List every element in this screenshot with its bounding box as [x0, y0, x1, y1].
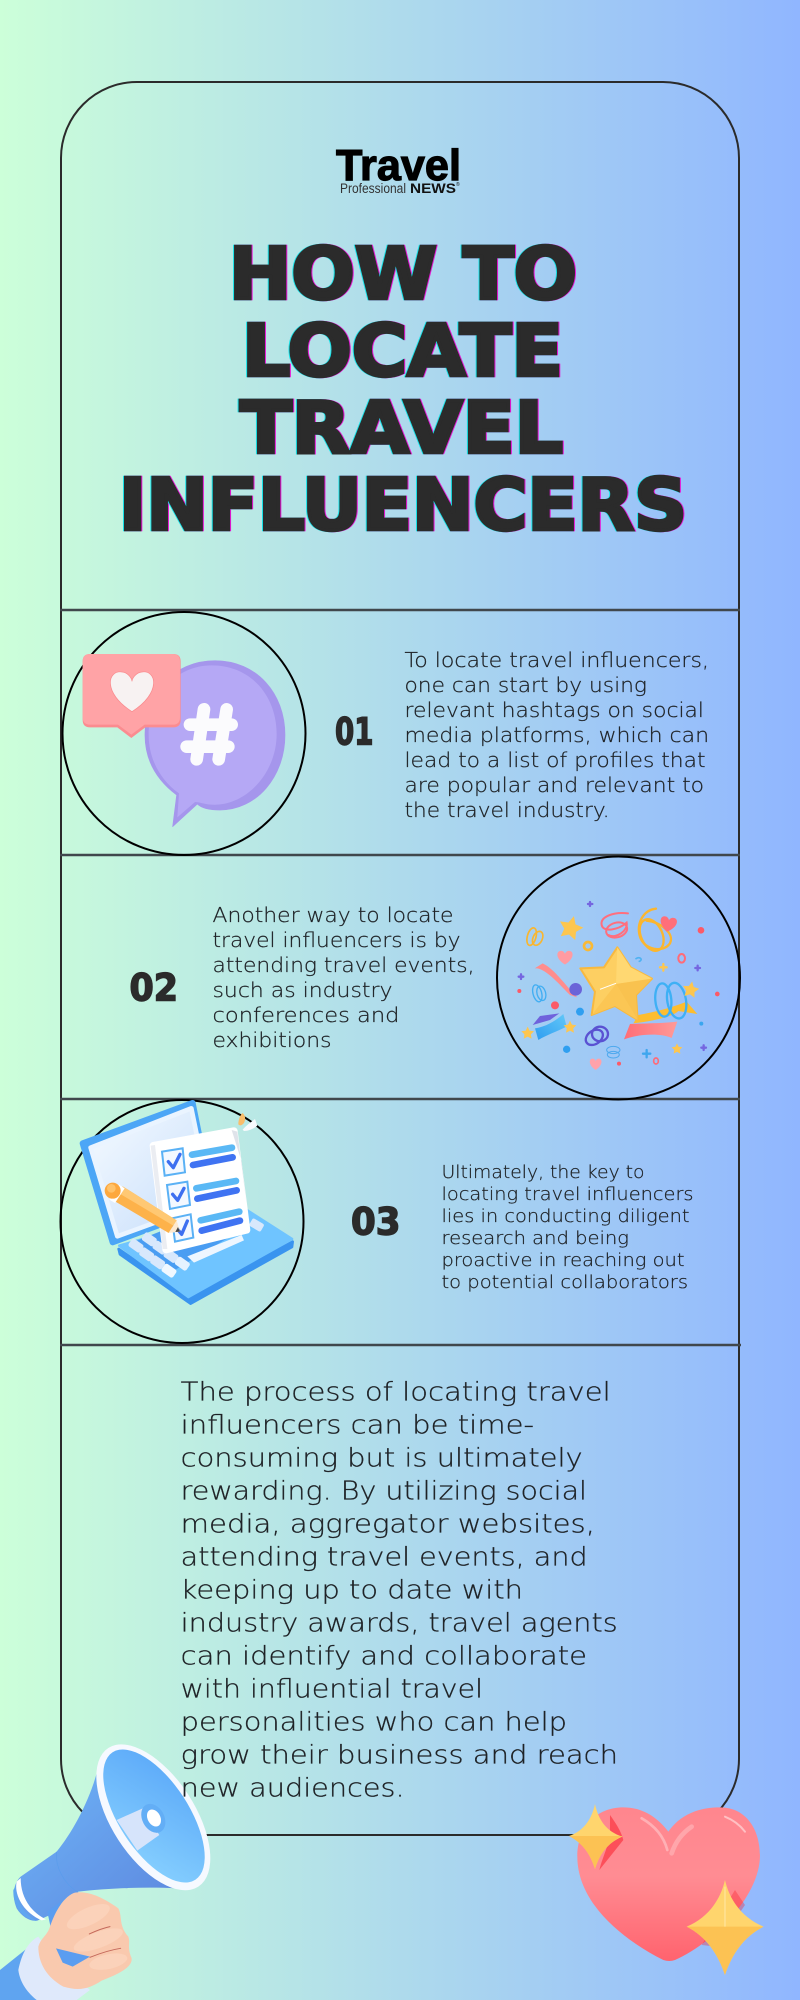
- closing paragraph: industry awards, travel agents: [181, 1608, 618, 1638]
- logo: Travel Professional News: Travel: [336, 141, 461, 190]
- logo: Travel Professional News: Professional: [340, 181, 406, 196]
- closing paragraph: personalities who can help: [181, 1708, 567, 1738]
- closing paragraph: keeping up to date with: [181, 1576, 523, 1606]
- megaphone rim and cone: [73, 1725, 233, 1909]
- closing paragraph: rewarding. By utilizing social: [181, 1476, 587, 1506]
- checklist paper: [151, 1130, 247, 1250]
- megaphone body: [13, 1773, 177, 1921]
- step 03 text: lies in conducting diligent: [442, 1206, 690, 1227]
- plus marks: [519, 902, 706, 1057]
- laptop base and keyboard: [119, 1210, 293, 1304]
- step 03 text: proactive in reaching out: [442, 1250, 684, 1271]
- step 02 text: exhibitions: [212, 1028, 332, 1052]
- laptop screen: [83, 1103, 213, 1242]
- large sparkle: [687, 1880, 764, 1975]
- sleeve and cuff: [0, 1937, 90, 2000]
- step 02 text: Another way to locate: [212, 903, 454, 927]
- step 02 number: 02: [130, 966, 178, 1010]
- icon: star and confetti: [517, 902, 720, 1070]
- step 03 circle: [60, 1100, 304, 1343]
- pencil: [105, 1183, 180, 1233]
- step 01 text: media platforms, which can: [404, 723, 709, 747]
- small stars: [521, 913, 700, 1054]
- coils and rings: [525, 909, 689, 1064]
- closing paragraph: media, aggregator websites,: [181, 1510, 595, 1540]
- step 01 text: [404, 648, 709, 822]
- step 02 text: such as industry: [212, 978, 392, 1002]
- logo: Travel Professional News: NEWS: [410, 181, 456, 196]
- step 02 text: attending travel events,: [212, 953, 474, 977]
- title: HOW TO: [229, 232, 577, 316]
- step 01 circle: [62, 612, 306, 855]
- title: TRAVEL: [240, 386, 563, 470]
- title: INFLUENCERS: [119, 464, 687, 546]
- closing paragraph: [181, 1378, 618, 1804]
- small sparkle: [569, 1804, 622, 1869]
- step 01 text: To locate travel influencers,: [404, 648, 709, 672]
- closing paragraph: with influential travel: [181, 1674, 483, 1704]
- step 01 text: are popular and relevant to: [404, 773, 704, 797]
- step 03 text: locating travel influencers: [442, 1184, 694, 1205]
- step 03 text: Ultimately, the key to: [442, 1162, 644, 1183]
- closing paragraph: can identify and collaborate: [181, 1642, 587, 1672]
- closing paragraph: The process of locating travel: [181, 1378, 611, 1408]
- pencil shavings: [238, 1113, 257, 1131]
- icon: hashtag speech bubble and heart notification: [83, 654, 285, 827]
- step 01 text: the travel industry.: [404, 798, 610, 822]
- pink like notification: [83, 654, 181, 738]
- hand: [38, 1892, 132, 1989]
- step 02 text: travel influencers is by: [212, 928, 460, 952]
- heart: [577, 1807, 760, 1961]
- closing paragraph: consuming but is ultimately: [181, 1444, 583, 1474]
- main star: [580, 947, 652, 1020]
- icon: megaphone in hand: [0, 1725, 233, 2000]
- step 03 text: to potential collaborators: [442, 1272, 688, 1293]
- handle: [47, 1893, 77, 1940]
- step 02 circle: [497, 856, 740, 1100]
- step 03 text: research and being: [442, 1228, 629, 1249]
- step 01 number: 01: [335, 710, 374, 754]
- step 03 number: 03: [351, 1200, 400, 1244]
- dots: [517, 927, 720, 1066]
- step 03 text: [442, 1162, 694, 1293]
- checkbox rows: [162, 1148, 240, 1242]
- confetti ribbons: [533, 963, 697, 1040]
- icon: laptop checklist and pencil: [83, 1103, 293, 1304]
- step 01 text: lead to a list of profiles that: [404, 748, 706, 772]
- rounded frame panel: [61, 82, 739, 1835]
- logo: Travel Professional News: ®: [456, 181, 460, 188]
- title: LOCATE: [242, 310, 563, 392]
- purple hashtag bubble: [145, 661, 285, 827]
- closing paragraph: grow their business and reach: [181, 1740, 618, 1770]
- step 01 text: relevant hashtags on social: [404, 698, 704, 722]
- step 02 text: conferences and: [212, 1003, 400, 1027]
- icon: heart with sparkles: [569, 1804, 764, 1975]
- closing paragraph: new audiences.: [181, 1774, 405, 1804]
- closing paragraph: attending travel events, and: [181, 1542, 588, 1572]
- title: [119, 232, 687, 546]
- step 01 text: one can start by using: [404, 673, 647, 697]
- small hearts: [557, 916, 678, 1070]
- step 02 text: [212, 903, 474, 1052]
- closing paragraph: influencers can be time-: [181, 1410, 534, 1440]
